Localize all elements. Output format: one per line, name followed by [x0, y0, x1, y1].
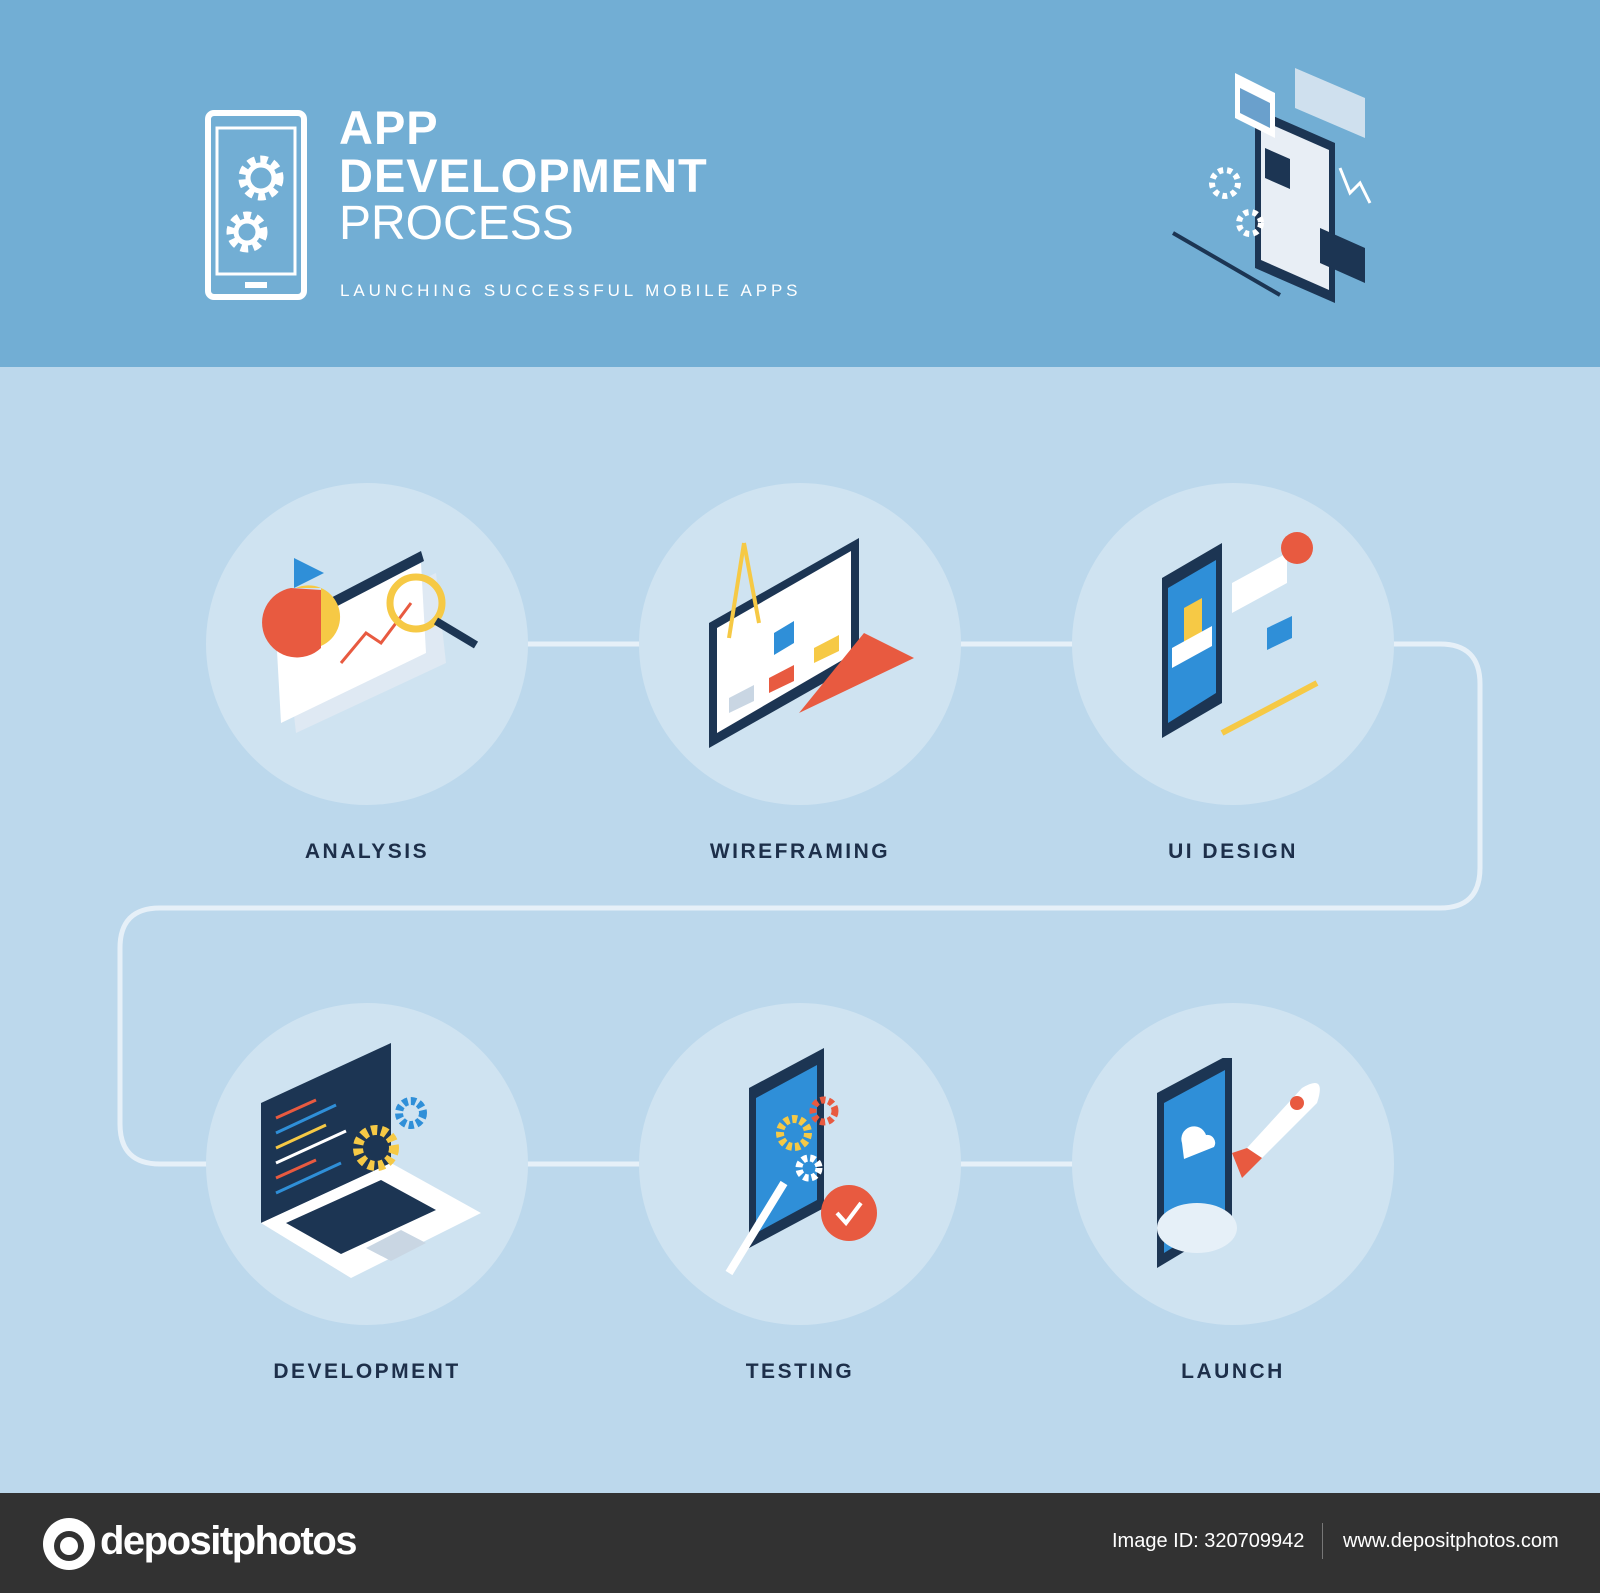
title: DEVELOPMENT [339, 149, 708, 202]
icon: testing phone [726, 1048, 877, 1275]
icon: laptop with code [261, 1043, 481, 1278]
label: ui design: UI DESIGN [1168, 840, 1298, 863]
logo: depositphotos [43, 1518, 356, 1570]
title [339, 101, 708, 250]
step: analysis [206, 483, 528, 863]
label: wireframing: WIREFRAMING [710, 840, 890, 863]
step: wireframing [639, 483, 961, 863]
icon: phone with gears [205, 110, 307, 300]
label: launch: LAUNCH [1181, 1360, 1285, 1383]
step: development [206, 1003, 528, 1383]
label: development: DEVELOPMENT [273, 1360, 461, 1383]
logo: depositphotos: depositphotos [100, 1519, 356, 1563]
illustration: header isometric phone [1172, 68, 1372, 303]
step: launch [1072, 1003, 1394, 1383]
label: testing: TESTING [746, 1360, 854, 1383]
connector path [118, 642, 1482, 1166]
step: ui design [1072, 483, 1394, 863]
header band [0, 0, 1600, 367]
icon: analysis chart [262, 551, 478, 733]
footer [0, 1493, 1600, 1593]
icon: ui design phone [1162, 532, 1318, 738]
title: APP [339, 101, 439, 154]
icon: launch phone with rocket [1157, 1058, 1320, 1268]
subtitle: LAUNCHING SUCCESSFUL MOBILE APPS [340, 281, 801, 300]
title: PROCESS [339, 197, 574, 250]
step: testing [639, 1003, 961, 1383]
footer text: url: www.depositphotos.com [1343, 1530, 1559, 1552]
footer text: image id: Image ID: 320709942 [1112, 1530, 1304, 1552]
icon: wireframe tablet [709, 538, 914, 748]
label: analysis: ANALYSIS [305, 840, 429, 863]
